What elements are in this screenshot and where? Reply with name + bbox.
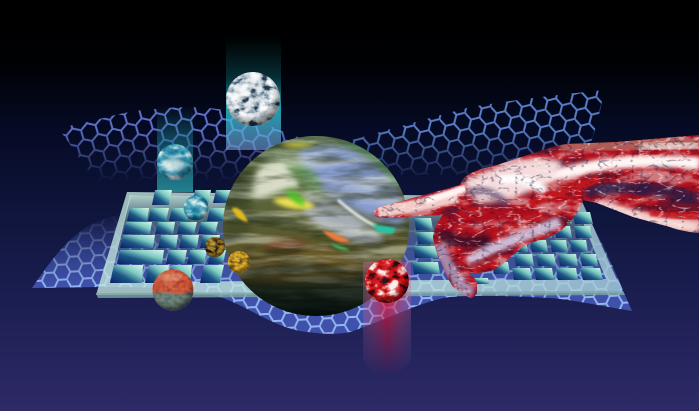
teal light beam, left [157, 106, 193, 192]
keys, left block [110, 190, 233, 283]
arm lower pale edge [596, 205, 699, 228]
gold sphere [228, 251, 250, 273]
sphere olive base [220, 133, 414, 319]
dark crumple lines [370, 130, 699, 302]
green patch [285, 160, 322, 195]
curled finger lavender tip [440, 245, 472, 294]
dark streak texture [220, 133, 414, 319]
deep palm [445, 210, 535, 226]
keyboard [96, 190, 625, 298]
pale streak texture [220, 133, 414, 319]
green rim [345, 142, 398, 185]
arm upper tone [560, 140, 699, 148]
white crumple lines [370, 130, 699, 302]
hand base colour [370, 130, 699, 302]
white marble sphere [225, 71, 281, 127]
arm upper right pale patch [640, 144, 699, 148]
hand mottled texture [370, 130, 699, 302]
lower hexagon mesh [32, 212, 632, 334]
curled finger dark [442, 232, 490, 243]
red wrist band [530, 178, 600, 204]
thumb red tip [470, 252, 502, 265]
upper hexagon mesh [57, 90, 602, 179]
keys, right block [412, 205, 603, 284]
large iridescent sphere [220, 133, 414, 319]
keyboard frame [96, 192, 623, 295]
teal sphere, small [183, 195, 209, 221]
lower brown zone [249, 249, 356, 282]
white streak [338, 200, 376, 226]
lavender-blue reflection area [299, 146, 405, 228]
bright green fleck [285, 190, 305, 206]
dark gold sphere [205, 237, 225, 257]
red light beam [363, 262, 411, 374]
grey knuckle shadow [470, 191, 508, 207]
arm white highlight [520, 161, 699, 182]
back of hand white [500, 179, 545, 192]
pale sheen blob [248, 162, 300, 198]
teal light beam, tall [226, 38, 281, 150]
index finger pale [378, 197, 458, 212]
green fleck under orange [330, 243, 350, 250]
red and blue marble sphere [152, 270, 194, 310]
reaching hand [370, 130, 699, 302]
yellow fleck top [280, 143, 316, 148]
silver band [302, 195, 385, 244]
arm lower red [650, 213, 699, 218]
index finger highlight [425, 188, 466, 201]
red crumpled sphere [364, 258, 410, 304]
back of hand pale area [465, 158, 562, 203]
arm dark veins [585, 187, 699, 200]
keyboard plate interior [108, 195, 612, 285]
red tint in lower zone [264, 238, 306, 250]
keyboard front edge [96, 291, 625, 298]
sphere lower shadow [236, 261, 401, 316]
thumb lavender highlight [468, 222, 560, 262]
orange highlight [322, 230, 350, 242]
dark olive left edge [223, 160, 255, 240]
gold fleck left [232, 208, 248, 222]
yellow band [272, 198, 316, 209]
teal sphere, upper [157, 144, 193, 180]
cyan-green edge glint [372, 224, 396, 234]
